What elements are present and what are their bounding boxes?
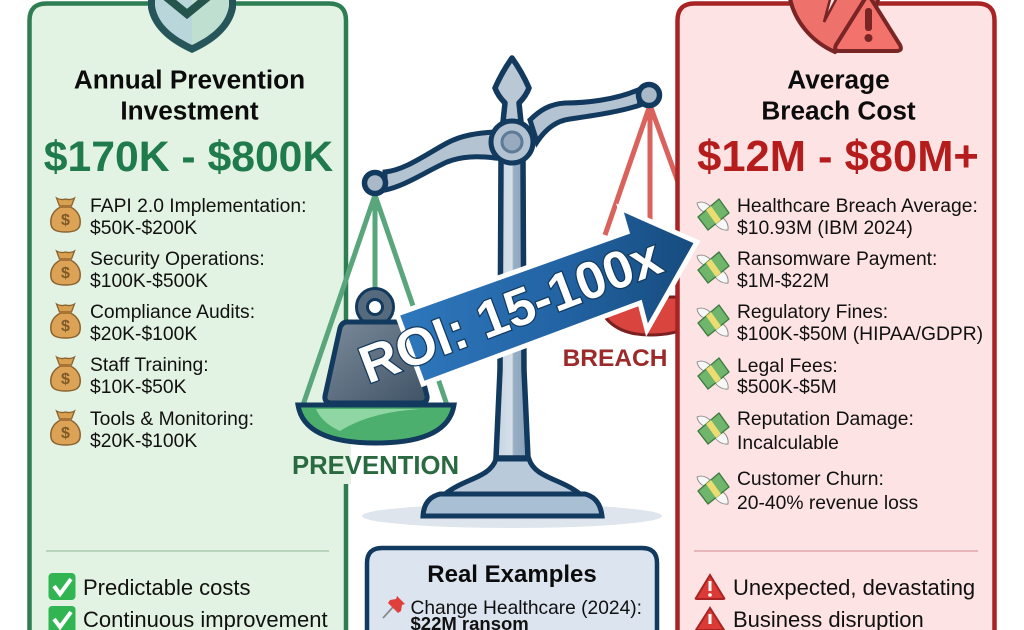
strings: breach pan [605,105,690,235]
item: regulatory fines [697,302,983,345]
item: reputation damage [697,409,914,454]
list: breach cost items [697,196,983,514]
item: compliance audits: $ [61,318,70,335]
item: ransomware payment [697,249,937,292]
item: reputation damage: Reputation Damage: [737,409,914,430]
example: change healthcare [410,598,642,630]
item: staff training: $ [61,371,70,388]
hub [491,121,533,163]
risks: breach [696,575,975,630]
heading: average breach cost [761,64,916,126]
arrow label: ROI: 15-100x [351,227,670,395]
label: prevention: PREVENTION [292,452,459,480]
panel: prevention investment [30,0,346,630]
heading: annual prevention investment: Investment [120,96,259,126]
risk: unexpected: Unexpected, devastating [733,575,975,600]
item: healthcare breach average [697,196,978,239]
strings: prevention pan [303,195,447,405]
item: FAPI 2.0 [51,196,306,239]
balance scale [298,58,662,528]
item: compliance audits: $20K-$100K [90,324,197,345]
beam: right [530,90,640,142]
panel: breach cost [678,0,994,630]
item: regulatory fines: $100K-$50M (HIPAA/GDPR) [737,324,983,345]
icon: broken heart with warning [789,0,901,52]
benefits: prevention [48,573,328,630]
arrow: ROI [351,208,697,395]
item: legal fees: $500K-$5M [737,377,837,398]
item: compliance audits [51,302,255,345]
base flare [445,459,580,494]
white label strip behind prevention [349,449,469,485]
item: security operations: $ [61,265,70,282]
heading: average breach cost: Average [787,64,890,94]
list: prevention cost items [51,196,306,452]
beam end: right [638,84,660,106]
item: customer churn: Customer Churn: [737,469,884,490]
item: staff training: Staff Training: [90,355,209,376]
item: healthcare breach average: Healthcare Breach Average: [737,196,978,217]
icon: shield [148,0,236,53]
post [496,160,528,458]
item: customer churn [697,469,918,514]
item: ransomware payment: $1M-$22M [737,271,829,292]
item: tools and monitoring [51,409,254,452]
item: security operations: $100K-$500K [90,271,208,292]
label: breach: BREACH [563,345,667,372]
weight [325,294,427,403]
icon: pushpin [383,596,405,618]
base slab [423,494,602,516]
item: FAPI 2.0: $ [61,212,70,229]
price range: prevention: $170K - $800K [44,133,333,181]
item: security operations: Security Operations: [90,249,265,270]
panel: real examples [367,548,657,630]
item: tools and monitoring: $ [61,425,70,442]
finial [495,58,529,122]
item: staff training: $10K-$50K [90,377,187,398]
item: regulatory fines: Regulatory Fines: [737,302,888,323]
beam end: left [364,172,386,194]
example: change healthcare: Change Healthcare (2024): [410,598,642,619]
beam: left [385,132,495,190]
item: compliance audits: Compliance Audits: [90,302,255,323]
scale pan: prevention [298,405,454,443]
item: legal fees [697,356,838,398]
item: FAPI 2.0: FAPI 2.0 Implementation: [90,196,306,217]
item: FAPI 2.0: $50K-$200K [90,218,197,239]
price range: breach: $12M - $80M+ [697,133,979,181]
scale pan: breach [596,297,710,335]
item: legal fees: Legal Fees: [737,356,838,377]
item: ransomware payment: Ransomware Payment: [737,249,937,270]
item: customer churn: 20-40% revenue loss [737,493,918,514]
heading: average breach cost: Breach Cost [761,96,916,126]
item: security operations [51,249,265,292]
shadow [362,504,662,528]
benefit: predictable costs: Predictable costs [83,575,251,600]
item: reputation damage: Incalculable [737,433,839,454]
heading: annual prevention investment: Annual Prevention [74,64,305,94]
item: staff training [51,355,209,398]
item: healthcare breach average: $10.93M (IBM 2024) [737,218,913,239]
item: tools and monitoring: Tools & Monitoring: [90,409,254,430]
item: tools and monitoring: $20K-$100K [90,431,197,452]
heading: real examples: Real Examples [427,561,597,588]
heading: annual prevention investment [74,64,305,126]
